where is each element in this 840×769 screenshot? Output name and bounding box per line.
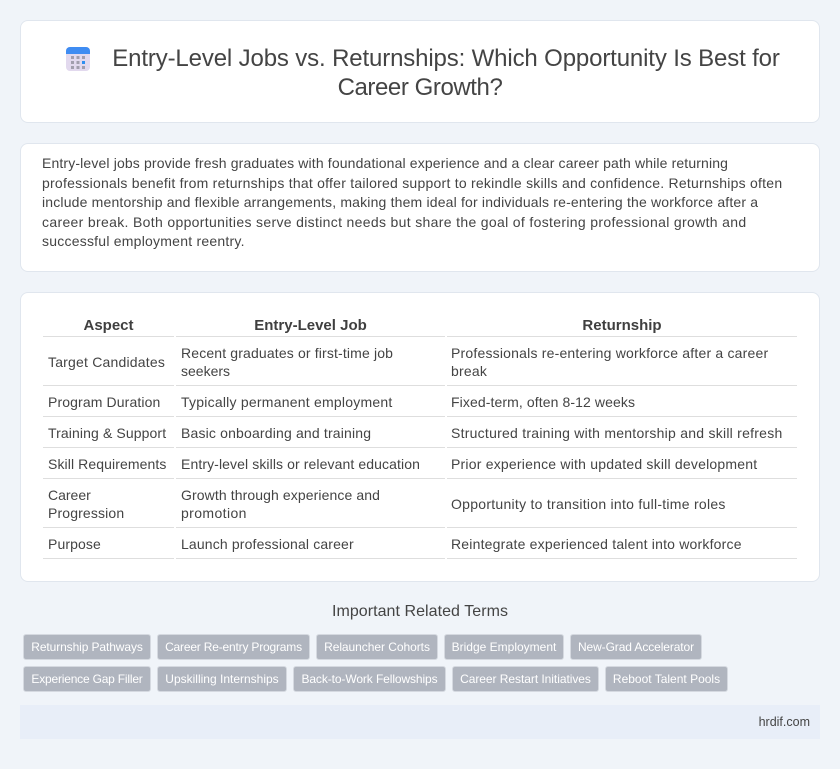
- row: target candidates: Recent graduates or first-time job: [181, 345, 393, 361]
- row: program duration: Program Duration: [48, 394, 160, 410]
- row: target candidates: seekers: [181, 363, 230, 379]
- summary paragraph: career break. Both opportunities serve distinct needs but share the goal of fostering professional growth and: [42, 214, 746, 230]
- row: target candidates: [48, 345, 768, 379]
- tag group: related terms: Career Restart Initiatives: [460, 672, 591, 686]
- tag group: related terms: Experience Gap Filler: [31, 672, 143, 686]
- tag group: related terms: Returnship Pathways: [31, 640, 143, 654]
- row: career progression: Growth through experience and: [181, 487, 380, 503]
- tag group: related terms: [23, 634, 728, 692]
- tag group: related terms: Relauncher Cohorts: [324, 640, 430, 654]
- tag group: related terms: Reboot Talent Pools: [613, 672, 720, 686]
- tag group: related terms: Career Re-entry Programs: [165, 640, 302, 654]
- table header row: Aspect: [83, 317, 134, 334]
- title: Career Growth?: [338, 74, 502, 101]
- heading: important related terms: Important Related Terms: [332, 603, 508, 620]
- row: skill requirements: Skill Requirements: [48, 456, 167, 472]
- row: target candidates: break: [451, 363, 487, 379]
- panel: header: [20, 20, 820, 123]
- icon: calendar: [66, 47, 90, 71]
- tag group: related terms: New-Grad Accelerator: [578, 640, 694, 654]
- panel: comparison table: [20, 292, 820, 582]
- table header row: Returnship: [582, 317, 662, 334]
- tag group: related terms: Upskilling Internships: [165, 672, 279, 686]
- table header row: Entry-Level Job: [254, 317, 367, 334]
- row: purpose: [48, 536, 742, 552]
- row: training and support: [48, 425, 783, 441]
- footer bar: [20, 705, 820, 739]
- row: skill requirements: Entry-level skills or relevant education: [181, 456, 420, 472]
- summary paragraph: include mentorship and flexible arrangements, making them ideal for individuals re-entering the workforce after a: [42, 194, 758, 210]
- row: skill requirements: [48, 456, 758, 472]
- row: career progression: Opportunity to transition into full-time roles: [451, 496, 726, 512]
- summary paragraph: [42, 155, 782, 249]
- row: program duration: [48, 394, 635, 410]
- row: training and support: Basic onboarding and training: [181, 425, 371, 441]
- summary paragraph: successful employment reentry.: [42, 233, 245, 249]
- title: Entry-Level Jobs vs. Returnships: Which Opportunity Is Best for: [112, 45, 780, 72]
- row: training and support: Training & Support: [48, 425, 166, 441]
- row: target candidates: Target Candidates: [48, 354, 165, 370]
- row: career progression: Progression: [48, 505, 124, 521]
- row: program duration: Fixed-term, often 8-12 weeks: [451, 394, 635, 410]
- row: skill requirements: Prior experience with updated skill development: [451, 456, 757, 472]
- row: program duration: Typically permanent employment: [181, 394, 393, 410]
- row: purpose: Purpose: [48, 536, 101, 552]
- row: target candidates: Professionals re-entering workforce after a career: [451, 345, 768, 361]
- panel: summary text: [20, 143, 820, 272]
- title: [112, 45, 780, 101]
- row: training and support: Structured training with mentorship and skill refresh: [451, 425, 783, 441]
- table header row: [83, 317, 662, 334]
- row: career progression: promotion: [181, 505, 247, 521]
- row: purpose: Reintegrate experienced talent into workforce: [451, 536, 742, 552]
- tag group: related terms: Bridge Employment: [452, 640, 556, 654]
- row: career progression: Career: [48, 487, 91, 503]
- row: career progression: [48, 487, 726, 521]
- footer source: hrdif.com: [759, 715, 810, 729]
- row: purpose: Launch professional career: [181, 536, 354, 552]
- tag group: related terms: Back-to-Work Fellowships: [301, 672, 438, 686]
- summary paragraph: professionals benefit from returnships that offer tailored support to rekindle skills and confidence. Returnships often: [42, 174, 782, 190]
- summary paragraph: Entry-level jobs provide fresh graduates with foundational experience and a clear career path while returning: [42, 155, 728, 171]
